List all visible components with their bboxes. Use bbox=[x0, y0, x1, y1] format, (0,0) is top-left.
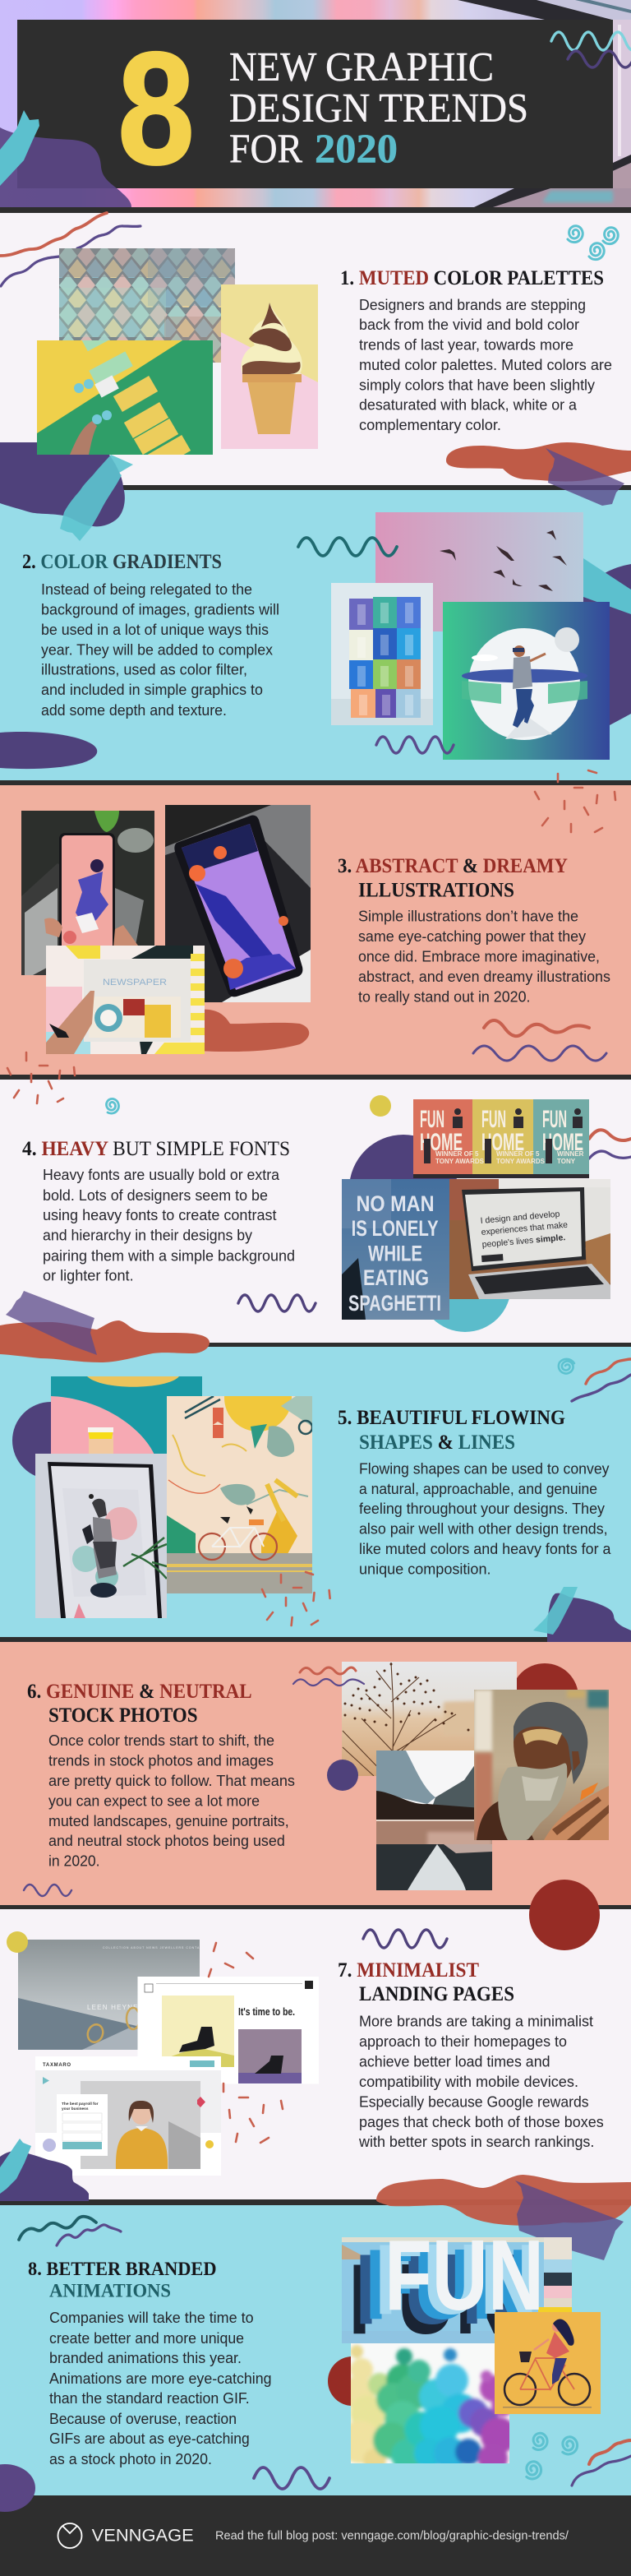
image: blue text poster: EATING bbox=[363, 1265, 429, 1290]
section 3: abstract and dreamy illustrations bbox=[7, 770, 615, 1103]
body text: or lighter font. bbox=[43, 1268, 134, 1284]
body text: feeling throughout your designs. They bbox=[359, 1501, 605, 1517]
section 2: color gradients bbox=[0, 442, 631, 769]
image: payroll landing page: The best payroll for bbox=[62, 2102, 99, 2107]
body text: muted color palettes. Muted colors are bbox=[359, 357, 612, 373]
image: Fun Home posters: FUN bbox=[481, 1106, 506, 1133]
image: payroll landing page: TAXMARO bbox=[43, 2063, 71, 2068]
body text: create better and more unique bbox=[49, 2330, 244, 2347]
image: Fun Home posters: WINNER bbox=[557, 1150, 584, 1158]
image: newspaper collage: NEWSPAPER bbox=[103, 978, 167, 987]
body text: Heavy fonts are usually bold or extra bbox=[43, 1167, 280, 1183]
section 1: muted color palettes bbox=[0, 213, 621, 471]
squiggles top left bbox=[19, 2217, 121, 2245]
heading bbox=[338, 1407, 565, 1454]
confetti bottom left bbox=[7, 1049, 75, 1103]
spiral bbox=[103, 1097, 122, 1116]
image: colored shingles bbox=[59, 248, 235, 363]
body text bbox=[41, 581, 279, 719]
body text: background of images, gradients will bbox=[41, 602, 279, 618]
body text bbox=[49, 2310, 272, 2467]
body text: like muted colors and heavy fonts for a bbox=[359, 1541, 611, 1557]
body text: Animations are more eye-catching bbox=[49, 2370, 272, 2387]
body text: simply colors that have been slightly bbox=[359, 377, 595, 393]
header panel bbox=[0, 0, 631, 207]
spirals bbox=[521, 2430, 581, 2482]
image: jewelry landing page bbox=[18, 1940, 205, 2050]
body text bbox=[48, 1732, 295, 1870]
body text: with better spots in search rankings. bbox=[358, 2134, 594, 2150]
body text: be used in a lot of unique ways this bbox=[41, 622, 269, 638]
purple brush bbox=[515, 2181, 624, 2260]
body text: Because of overuse, reaction bbox=[49, 2411, 237, 2427]
squiggles bbox=[24, 1667, 364, 1896]
image: Fun Home posters: HOME bbox=[542, 1129, 583, 1156]
body text: achieve better load times and bbox=[359, 2054, 550, 2070]
squiggles bbox=[0, 213, 140, 286]
squiggle teal bbox=[298, 538, 397, 556]
image: payroll landing page bbox=[35, 2056, 221, 2176]
heading: ILLUSTRATIONS bbox=[358, 880, 514, 902]
image: blue text poster: SPAGHETTI bbox=[348, 1291, 441, 1316]
image: blue text poster bbox=[342, 1179, 449, 1320]
body text: once did. Embrace more imaginative, bbox=[358, 948, 600, 964]
mustard dot bbox=[7, 1931, 28, 1953]
body text: pairing them with a simple background bbox=[43, 1248, 295, 1265]
dark red circle bbox=[529, 1880, 600, 1950]
body text: pages that check both of those boxes bbox=[359, 2114, 604, 2130]
image: FUN mural: FUN bbox=[365, 2228, 529, 2340]
heading: 1. MUTED COLOR PALETTES bbox=[340, 267, 604, 289]
image: framed poster bbox=[35, 1454, 167, 1618]
body text: GIFs are about as eye-catching bbox=[49, 2430, 250, 2447]
title: DESIGN TRENDS bbox=[229, 84, 528, 130]
image: green and yellow boxes bbox=[37, 340, 213, 455]
image: dried branches bbox=[342, 1662, 517, 1776]
section 7: minimalist landing pages bbox=[0, 1930, 604, 2201]
section 8: better branded animations bbox=[19, 2175, 631, 2489]
image: phone with purple illustration bbox=[165, 805, 311, 1002]
image: shoes landing page bbox=[138, 1977, 319, 2083]
teal brush bbox=[533, 1587, 578, 1635]
section 4: heavy but simple fonts bbox=[22, 1095, 631, 1332]
image: FUN mural: FUN bbox=[348, 2243, 513, 2355]
rust blob bbox=[0, 1320, 210, 1362]
image: Fun Home posters: FUN bbox=[542, 1106, 567, 1133]
image: Fun Home posters: HOME bbox=[420, 1129, 463, 1156]
image: FUN mural: FUN bbox=[375, 2223, 537, 2335]
heading: LANDING PAGES bbox=[359, 1983, 514, 2005]
image: blue text poster: NO MAN bbox=[357, 1191, 434, 1216]
squiggle purple bbox=[376, 737, 454, 753]
purple brush section 1 bbox=[546, 448, 624, 506]
image: FUN mural: FUN bbox=[355, 2233, 519, 2345]
image: gradient paper tower bbox=[331, 583, 433, 725]
body text: also pair well with other design trends, bbox=[359, 1521, 608, 1538]
blog link: Read the full blog post: venngage.com/blog/graphic-design-trends/ bbox=[215, 2529, 569, 2543]
body text: abstract, and even dreamy illustrations bbox=[358, 969, 610, 985]
rust blob bbox=[197, 1010, 309, 1052]
body text: compatibility with mobile devices. bbox=[359, 2074, 578, 2090]
image: ice cream bbox=[221, 284, 318, 449]
body text: are pretty quick to follow. That means bbox=[48, 1773, 295, 1789]
image: bicycle illustration bbox=[495, 2312, 601, 2414]
teal brush right bbox=[583, 558, 631, 614]
image: laptop photo: experiences that make bbox=[481, 1220, 569, 1237]
image: VR gradient illustration bbox=[443, 602, 610, 760]
body text: unique composition. bbox=[359, 1561, 491, 1578]
purple blob bottom right bbox=[547, 1593, 631, 1642]
purple blob bottom left bbox=[0, 2151, 89, 2201]
body text: Simple illustrations don’t have the bbox=[358, 908, 578, 924]
purple circle bbox=[327, 1760, 358, 1791]
heading: STOCK PHOTOS bbox=[48, 1704, 197, 1727]
header squiggles bbox=[551, 32, 631, 67]
image: laptop photo bbox=[449, 1179, 610, 1299]
body text: bold. Lots of designers seem to be bbox=[43, 1187, 268, 1204]
body text: add some depth and texture. bbox=[41, 702, 227, 719]
teal brush bbox=[0, 2139, 31, 2194]
image: pink to blue gradient with birds bbox=[375, 512, 583, 631]
image: Fun Home posters: TONY AWARDS bbox=[496, 1158, 546, 1165]
confetti bbox=[209, 1943, 283, 2143]
heading bbox=[338, 855, 568, 902]
image: jewelry landing page: LEEN HEYNE bbox=[87, 2004, 139, 2011]
purple blob right bbox=[583, 564, 631, 725]
section 6: genuine and neutral stock photos bbox=[24, 1662, 609, 1950]
heading bbox=[338, 1959, 514, 2005]
purple blob top left bbox=[0, 442, 125, 526]
squiggle purple bbox=[363, 1930, 447, 1948]
heading: 7. MINIMALIST bbox=[338, 1959, 479, 1982]
image: jewelry landing page: COLLECTION ABOUT NEWS JEWELLERS CONTACT bbox=[103, 1946, 205, 1949]
image: shoes landing page: It's time to be. bbox=[238, 2006, 295, 2018]
icon: Venngage logo bbox=[58, 2523, 82, 2548]
body text: trends in stock photos and images bbox=[48, 1752, 274, 1769]
title: NEW GRAPHIC bbox=[229, 43, 494, 89]
image: Fun Home posters: TONY bbox=[557, 1158, 576, 1165]
body text bbox=[359, 1460, 611, 1578]
body text: same eye-catching power that they bbox=[358, 928, 586, 945]
body text: illustrations, used as color filter, bbox=[41, 662, 247, 678]
body text: More brands are taking a minimalist bbox=[359, 2013, 593, 2029]
squiggles bbox=[473, 1020, 606, 1061]
image: Fun Home posters: WINNER OF 5 bbox=[435, 1150, 479, 1158]
body text bbox=[358, 908, 610, 1005]
rust blob section 1 bbox=[446, 442, 631, 481]
header background photo detail bbox=[458, 0, 631, 207]
body text: and neutral stock photos being used bbox=[48, 1833, 285, 1849]
body text: using heavy fonts to create contrast bbox=[43, 1207, 276, 1223]
image: colored smoke bbox=[351, 2343, 509, 2463]
image: blue text poster: WHILE bbox=[368, 1242, 422, 1266]
title bbox=[229, 43, 528, 171]
purple circle bbox=[349, 1135, 458, 1243]
image: Fun Home posters: FUN bbox=[420, 1106, 444, 1133]
image: mural with bicycle bbox=[167, 1396, 312, 1593]
brand name: VENNGAGE bbox=[92, 2527, 194, 2546]
body text: Flowing shapes can be used to convey bbox=[359, 1460, 610, 1477]
body text: Designers and brands are stepping bbox=[359, 297, 586, 313]
body text: complementary color. bbox=[359, 417, 501, 433]
image: laptop photo: I design and develop bbox=[480, 1209, 560, 1226]
heading bbox=[27, 1681, 252, 1727]
image: phone with pink illustration bbox=[21, 811, 154, 975]
image: laptop photo: people's lives simple. bbox=[481, 1233, 566, 1250]
body text: year. They will be added to complex bbox=[41, 642, 273, 659]
body text: branded animations this year. bbox=[49, 2350, 242, 2366]
image: portrait of old man bbox=[474, 1690, 609, 1840]
squiggle purple bbox=[254, 2467, 329, 2489]
image: FUN mural: FUN bbox=[385, 2219, 544, 2331]
header teal brush bbox=[0, 110, 39, 186]
body text: Once color trends start to shift, the bbox=[48, 1732, 274, 1749]
image: blue text poster: IS LONELY bbox=[352, 1216, 439, 1241]
body text: and included in simple graphics to bbox=[41, 682, 263, 698]
body text bbox=[43, 1167, 295, 1284]
rust blob bbox=[376, 2175, 631, 2226]
body text: as a stock photo in 2020. bbox=[49, 2451, 212, 2467]
purple circle bbox=[12, 1402, 90, 1479]
body text: in 2020. bbox=[48, 1853, 100, 1870]
body text: than the standard reaction GIF. bbox=[49, 2390, 250, 2407]
body text: a natural, approachable, and genuine bbox=[359, 1481, 597, 1497]
body text: to really stand out in 2020. bbox=[358, 988, 531, 1005]
footer bbox=[0, 2464, 631, 2576]
spiral bbox=[556, 1356, 576, 1376]
heading: 4. HEAVY BUT SIMPLE FONTS bbox=[22, 1138, 290, 1160]
heading: 3. ABSTRACT & DREAMY bbox=[338, 855, 568, 877]
image: Fun Home posters bbox=[413, 1099, 589, 1178]
body text: desaturated with black, white or a bbox=[359, 397, 578, 414]
header purple blob bbox=[0, 127, 131, 207]
purple brush bbox=[6, 1291, 97, 1355]
body text: muted landscapes, genuine portraits, bbox=[48, 1813, 289, 1829]
heading: 6. GENUINE & NEUTRAL bbox=[27, 1681, 252, 1703]
heading: ANIMATIONS bbox=[49, 2281, 171, 2301]
heading: 5. BEAUTIFUL FLOWING bbox=[338, 1407, 565, 1429]
heading: SHAPES & LINES bbox=[359, 1431, 515, 1454]
body text: you can expect to see a lot more bbox=[48, 1792, 260, 1809]
heading bbox=[28, 2259, 217, 2301]
number 8: 8 bbox=[117, 19, 195, 198]
image: newspaper collage bbox=[46, 946, 205, 1054]
body text: Companies will take the time to bbox=[49, 2310, 254, 2326]
body text: and hierarchy in their designs by bbox=[43, 1227, 252, 1243]
purple blob left bbox=[0, 732, 97, 769]
image: mountain lake bbox=[376, 1750, 492, 1890]
image: Fun Home posters: WINNER OF 5 bbox=[496, 1150, 540, 1158]
body text: approach to their homepages to bbox=[359, 2033, 567, 2050]
squiggles bottom right bbox=[572, 2440, 631, 2486]
teal circle bbox=[419, 1240, 511, 1332]
squiggles right bbox=[589, 1130, 631, 1159]
heading: 2. COLOR GRADIENTS bbox=[22, 551, 222, 573]
body text bbox=[359, 297, 612, 433]
purple circle overlapping footer bbox=[0, 2464, 35, 2512]
body text: trends of last year, towards more bbox=[359, 337, 573, 354]
teal brush top left bbox=[60, 455, 133, 541]
image: teal and pink wall bbox=[51, 1376, 202, 1459]
body text: back from the vivid and bold color bbox=[359, 317, 579, 333]
body text bbox=[358, 2013, 604, 2150]
title: FOR bbox=[229, 125, 303, 171]
confetti top right bbox=[535, 770, 615, 832]
yellow dot bbox=[370, 1095, 391, 1117]
image: Fun Home posters: HOME bbox=[481, 1129, 524, 1156]
image: Fun Home posters: TONY AWARDS bbox=[435, 1158, 485, 1165]
heading: 8. BETTER BRANDED bbox=[28, 2259, 217, 2279]
body text: Instead of being relegated to the bbox=[41, 581, 252, 598]
body text: Especially because Google rewards bbox=[359, 2094, 589, 2111]
title: 2020 bbox=[315, 125, 398, 171]
dark red half circle bbox=[328, 2356, 377, 2406]
spirals bbox=[564, 223, 621, 263]
squiggles bbox=[572, 1359, 631, 1401]
image: payroll landing page: your business bbox=[62, 2107, 89, 2111]
dark red half circle bbox=[511, 1663, 578, 1731]
confetti bbox=[262, 1572, 330, 1626]
squiggle bbox=[238, 1295, 316, 1311]
section 5: beautiful flowing shapes and lines bbox=[0, 1291, 631, 1642]
